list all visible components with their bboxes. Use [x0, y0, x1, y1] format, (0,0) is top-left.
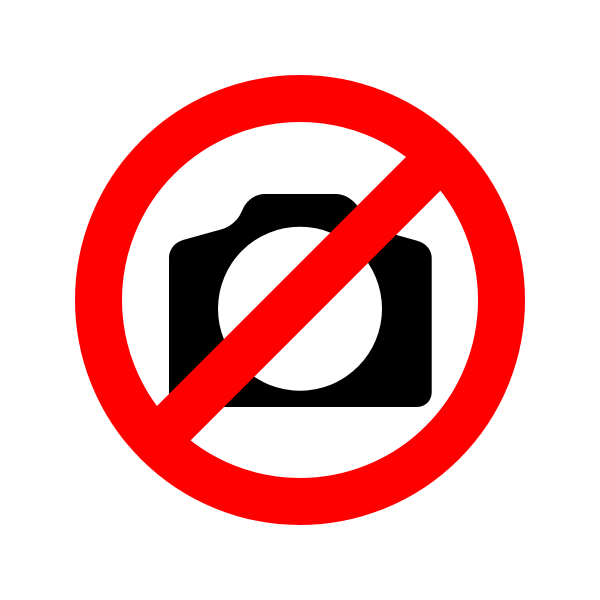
icon: prohibition slash	[138, 138, 460, 460]
icon: prohibition ring	[98, 98, 502, 502]
icon: camera	[169, 194, 432, 407]
